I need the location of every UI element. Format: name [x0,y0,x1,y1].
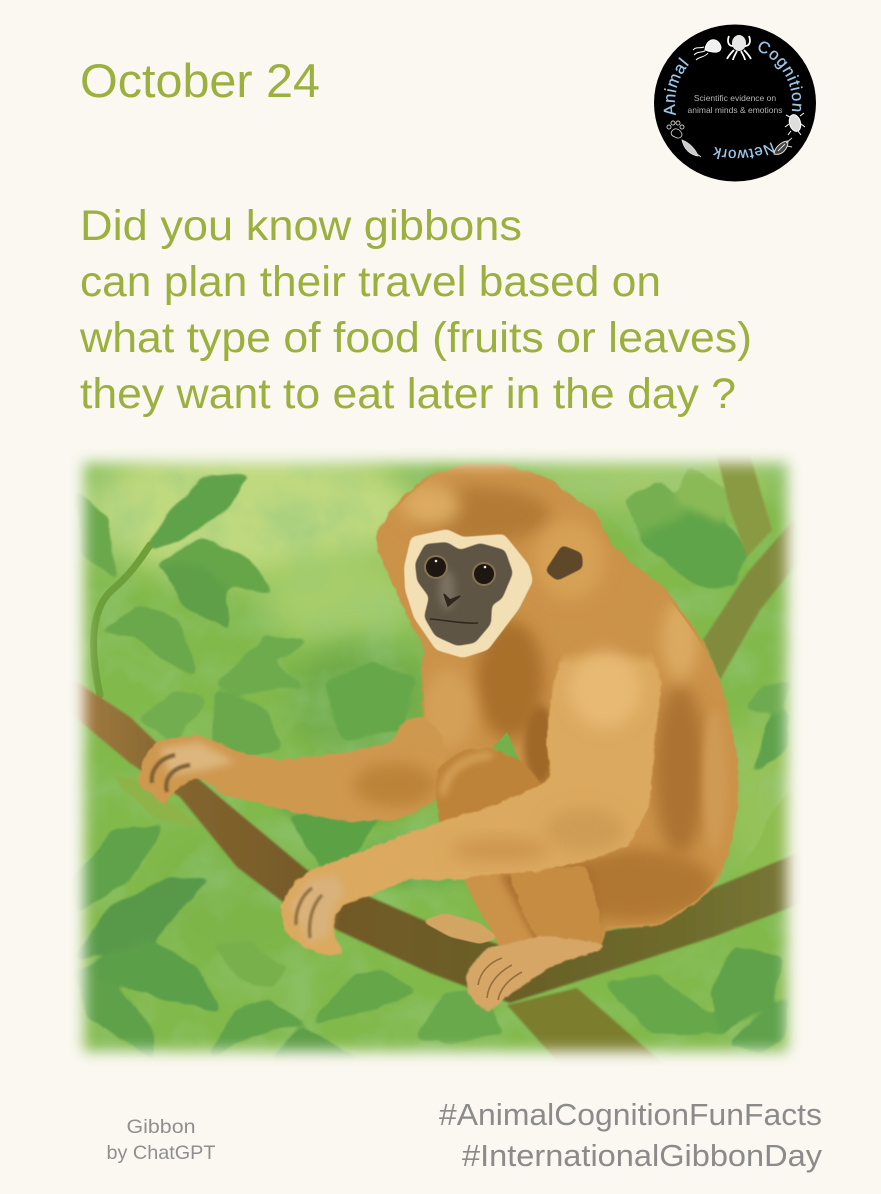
question text block: what type of food (fruits or leaves) [79,314,752,362]
question text block [79,202,752,418]
caption: Gibbon by ChatGPT: Gibbon [126,1116,196,1138]
gibbon foot [466,936,604,1013]
question text block: Did you know gibbons [80,202,522,250]
main branch [62,672,810,1003]
forest background [60,440,810,1080]
icon: octopus [727,35,751,60]
gibbon raised knee [436,748,540,822]
hashtags: #InternationalGibbonDay [462,1138,823,1173]
icon: paw print [667,121,684,138]
gibbon lower leg [508,866,605,944]
gibbon fur shading [400,483,727,940]
logo ring text: Animal [664,57,689,116]
caption: Gibbon by ChatGPT [106,1116,216,1164]
lower branch [506,987,655,1058]
logo: Animal Cognition Network badge [654,24,816,182]
stems [94,545,150,695]
gibbon near arm and hand [280,622,662,955]
hashtags [439,1097,823,1173]
far arm shading [152,742,437,807]
gibbon far arm and hand [138,715,449,822]
gibbon ear [545,545,583,581]
gibbon eye left [424,555,448,579]
caption: Gibbon by ChatGPT: by ChatGPT [106,1142,216,1164]
icon: fish [774,138,792,154]
gibbon mouth [430,619,478,623]
side branch right [703,518,800,680]
green gap between arm and body [492,732,520,762]
logo tagline [688,93,782,115]
knee highlight [443,755,492,795]
hashtags: #AnimalCognitionFunFacts [439,1097,822,1132]
illustration: gibbon on branch [60,440,810,1080]
logo tagline: animal minds & emotions [688,105,782,115]
icon: beetle [785,113,805,135]
icon: jellyfish [693,40,721,60]
logo ring text [664,42,803,160]
question text block: can plan their travel based on [80,258,661,306]
gibbon tucked foot [421,913,499,944]
logo tagline: Scientific evidence on [694,93,776,103]
gibbon torso and head [376,463,739,947]
logo ring text: Network [712,142,774,160]
icon: feather [682,140,701,157]
gibbon eye right [472,562,496,586]
gibbon muzzle highlight [439,570,455,610]
gibbon nose [444,594,460,606]
gibbon [138,463,739,1013]
background branch upper right [717,455,772,557]
leaves [72,466,799,1062]
date heading: October 24 [80,54,320,107]
gibbon face ruff [404,529,533,658]
question text block: they want to eat later in the day ? [80,370,736,418]
logo ring text: Cognition [758,42,803,112]
gibbon face [415,542,513,646]
